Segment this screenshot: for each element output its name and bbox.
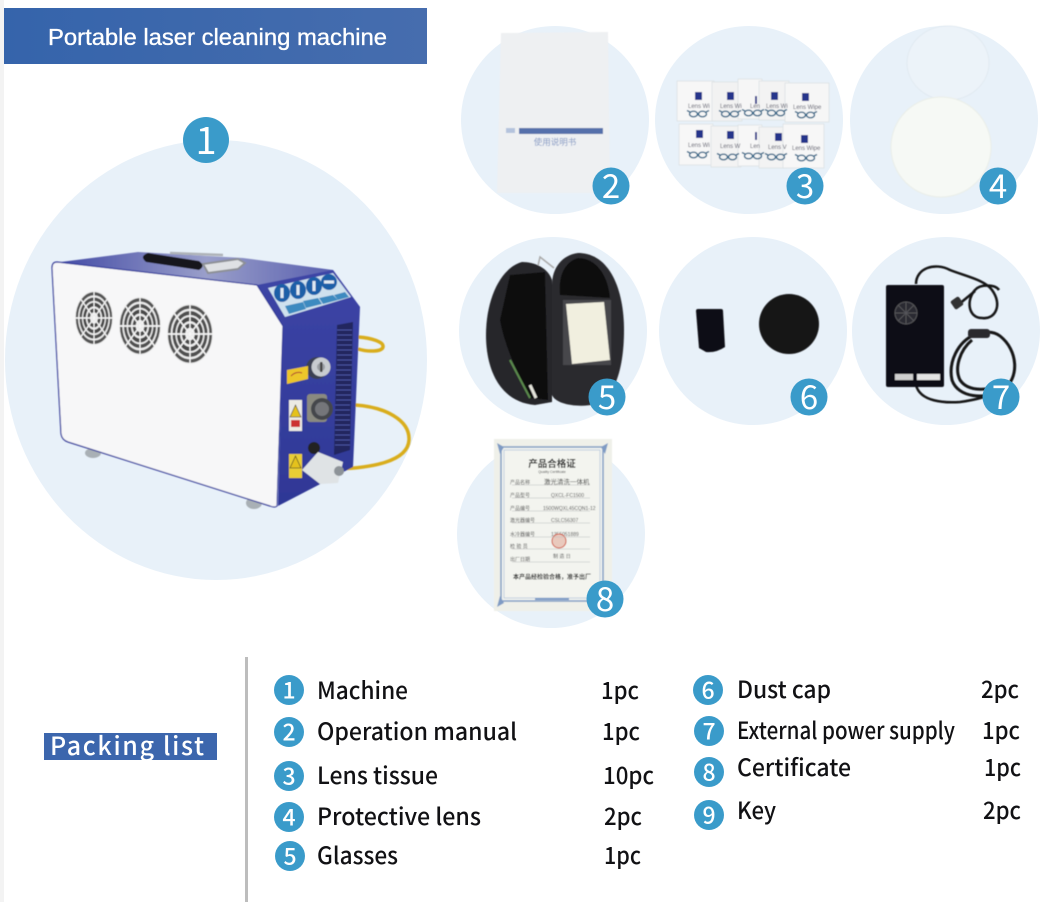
icon: lens wipes: Lens Wi (688, 104, 710, 110)
icon: quality certificate: 产品型号 (510, 492, 530, 499)
row 7 external power supply: 7 (702, 712, 716, 746)
badge 8: 8 (596, 573, 614, 621)
vent (334, 322, 353, 455)
icon: quality certificate: 激光清洗一体机 (544, 477, 590, 486)
icon: glasses in case (486, 253, 624, 406)
icon: quality certificate: CSLC56307 (551, 518, 578, 524)
panel: item 4 protective lens (850, 26, 1038, 214)
icon: quality certificate: Quality Certificate (538, 470, 566, 474)
icon: quality certificate: 1500WQXL45CQN1-12 (543, 506, 596, 512)
row 4 protective lens: 2pc (604, 798, 642, 832)
badge 3: 3 (796, 160, 814, 208)
row 9 key (694, 792, 1021, 830)
icon: dust caps (696, 294, 819, 354)
row 7 external power supply: External power supply (737, 712, 955, 746)
badge 6 (790, 371, 828, 419)
icon: lens wipes: Lens Wipe (792, 146, 821, 152)
body top (53, 252, 360, 327)
handle (170, 253, 223, 255)
packing list: right column (693, 671, 1021, 830)
row 6 dust cap: Dust cap (737, 671, 831, 705)
row 8 certificate: Certificate (737, 749, 851, 783)
key switch (306, 357, 328, 379)
row 9 key: Key (737, 792, 776, 826)
row 3 lens tissue (274, 757, 654, 792)
icon: lens wipes: Lens Wi (688, 143, 710, 149)
row 9 key: 9 (702, 796, 716, 830)
badge 1 (183, 110, 229, 165)
icon: quality certificate: 产品编号 (510, 505, 530, 512)
badge 7: 7 (992, 371, 1010, 419)
row 5 glasses: 5 (283, 838, 297, 872)
icon: manual (497, 32, 610, 193)
icon: lens wipes: Lens Wi (720, 104, 742, 110)
row 2 operation manual: 2 (282, 714, 296, 748)
icon: lens wipes: Lens V (768, 145, 787, 151)
icon: quality certificate: QXCL-FC1500 (551, 493, 584, 499)
badge 1: 1 (195, 110, 217, 165)
badge 3 (786, 160, 824, 208)
icon: manual: 使用说明书 (534, 137, 577, 147)
row 8 certificate: 1pc (984, 749, 1021, 783)
badge 4 (980, 160, 1016, 208)
warning labels (289, 400, 302, 431)
fans (75, 291, 113, 345)
panel: item 5 glasses (459, 237, 647, 425)
icon: quality certificate: 产品名称 (510, 479, 530, 486)
badge 5: 5 (598, 371, 616, 419)
row 6 dust cap: 6 (701, 672, 715, 706)
panel: item 2 operation manual (461, 26, 649, 214)
row 9 key: 2pc (983, 792, 1021, 826)
row 3 lens tissue: Lens tissue (317, 757, 438, 791)
row 8 certificate (694, 749, 1021, 788)
icon: quality certificate: 水冷器编号 (510, 531, 535, 538)
row 6 dust cap: 2pc (981, 671, 1019, 705)
icon: quality certificate: 产品合格证 (528, 458, 576, 470)
row 4 protective lens (274, 798, 642, 832)
title banner (4, 8, 427, 64)
panel: item 8 certificate (457, 439, 645, 628)
row 2 operation manual: 1pc (602, 713, 640, 747)
icon: lens wipes: Lens W (720, 144, 741, 150)
icon: lens wipes (677, 79, 829, 168)
row 3 lens tissue: 3 (282, 758, 296, 792)
icon: lens wipes: Len (750, 104, 760, 110)
icon: two protective lenses (891, 26, 991, 197)
icon: quality certificate: 本产品经检验合格，准予出厂 (513, 573, 591, 581)
packing list: left column (274, 672, 654, 872)
safety labels (268, 273, 351, 317)
row 2 operation manual (274, 713, 640, 748)
icon: lens wipes: Lens Wi (766, 104, 788, 110)
icon: quality certificate: 1355051889 (551, 532, 579, 538)
title banner: Portable laser cleaning machine (48, 24, 387, 50)
badge 5 (588, 371, 626, 419)
row 3 lens tissue: 10pc (603, 757, 654, 791)
icon: power supply (886, 266, 1015, 402)
panel: item 1 machine (5, 110, 427, 580)
row 8 certificate: 8 (702, 754, 716, 788)
panel: item 7 external power supply (852, 237, 1040, 425)
panel: item 6 dust cap (659, 237, 847, 425)
icon: quality certificate: 出厂日期 (510, 556, 530, 563)
icon: quality certificate (494, 439, 612, 611)
row 6 dust cap (693, 671, 1019, 706)
badge 4: 4 (989, 160, 1007, 208)
panel: item 3 lens tissue (655, 26, 843, 214)
row 4 protective lens: 4 (282, 798, 296, 832)
icon: lens wipes: Len (750, 144, 760, 150)
row 2 operation manual: Operation manual (317, 713, 517, 747)
row 1 machine: 1 (282, 672, 296, 706)
white front panel (52, 262, 283, 507)
cable gland (308, 442, 320, 454)
row 1 machine: Machine (317, 672, 408, 706)
badge 2: 2 (602, 160, 620, 208)
packing list heading: Packing list (50, 727, 204, 763)
badge 8 (586, 573, 624, 621)
power connector (307, 394, 327, 422)
badge 6: 6 (800, 371, 818, 419)
icon: quality certificate: 检 验 员 (510, 543, 528, 550)
badge 7 (982, 371, 1020, 419)
icon: lens wipes: Lens Wipe (793, 105, 822, 111)
row 4 protective lens: Protective lens (317, 798, 481, 832)
yellow cables (358, 337, 383, 351)
icon: quality certificate: 激光器编号 (510, 517, 535, 524)
row 1 machine: 1pc (601, 672, 639, 706)
icon: portable laser cleaning machine (52, 252, 409, 509)
row 1 machine (274, 672, 639, 706)
row 5 glasses (275, 837, 641, 872)
row 5 glasses: 1pc (604, 837, 641, 871)
feet (85, 448, 101, 458)
row 5 glasses: Glasses (317, 837, 398, 871)
row 7 external power supply: 1pc (982, 712, 1020, 746)
icon: quality certificate: 制 造 日 (553, 553, 571, 560)
blue side panel (257, 270, 360, 506)
badge 2 (592, 160, 630, 208)
